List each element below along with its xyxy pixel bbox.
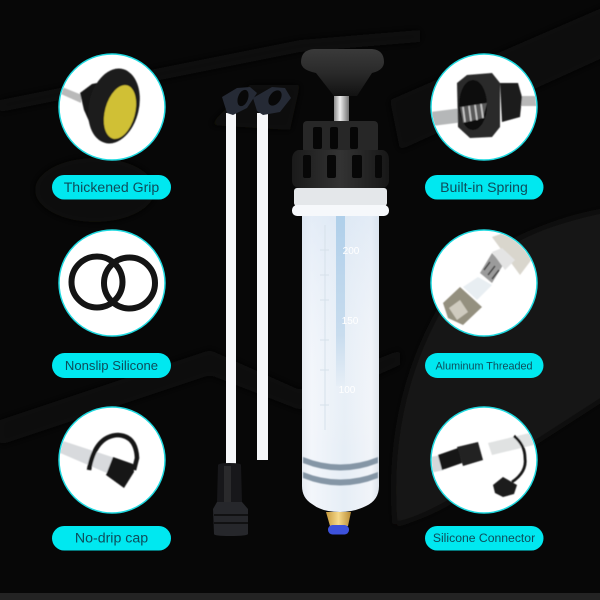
suction tubes bbox=[213, 87, 291, 536]
graduation marks: 150 bbox=[342, 316, 359, 327]
icon: thickened grip knob bbox=[59, 54, 165, 160]
panel: Aluminum Threaded bbox=[425, 230, 544, 378]
blue ring bbox=[328, 525, 349, 534]
label pill bbox=[52, 353, 171, 378]
label pill: Nonslip Silicone bbox=[65, 358, 158, 373]
label pill bbox=[52, 526, 171, 550]
panel: Nonslip Silicone bbox=[52, 230, 171, 378]
icon: silicone connector bbox=[430, 407, 542, 513]
lower cap bbox=[292, 150, 389, 188]
tube connector bbox=[213, 463, 248, 536]
hand pump syringe bbox=[292, 49, 389, 534]
syringe body bbox=[302, 215, 379, 512]
label pill: Thickened Grip bbox=[64, 179, 159, 195]
collar bbox=[292, 188, 389, 216]
label pill bbox=[52, 175, 171, 200]
panel: No-drip cap bbox=[52, 407, 171, 550]
label pill: Silicone Connector bbox=[433, 531, 535, 545]
icon: no-drip cap bbox=[58, 407, 165, 513]
brass nozzle bbox=[326, 512, 351, 526]
graduation marks bbox=[320, 225, 360, 430]
label pill bbox=[425, 175, 544, 200]
label pill bbox=[425, 526, 544, 550]
tube clips bbox=[222, 87, 291, 115]
panel: Thickened Grip bbox=[52, 54, 171, 200]
left tube bbox=[226, 113, 236, 464]
gauge bands bbox=[303, 457, 378, 486]
upper cap bbox=[303, 121, 378, 153]
panel: Built-in Spring bbox=[425, 54, 544, 200]
icon: built-in spring cap bbox=[430, 54, 538, 160]
label pill: Aluminum Threaded bbox=[435, 360, 533, 372]
panel: Silicone Connector bbox=[425, 407, 544, 550]
right tube bbox=[257, 113, 268, 460]
label pill: No-drip cap bbox=[75, 530, 148, 546]
icon: two o-rings bbox=[59, 230, 165, 336]
graduation marks: 200 bbox=[343, 246, 360, 257]
piston rod bbox=[334, 95, 349, 123]
center stripe bbox=[336, 216, 345, 386]
graduation marks: 100 bbox=[339, 385, 356, 396]
knob bbox=[301, 49, 384, 96]
label pill: Built-in Spring bbox=[440, 179, 528, 195]
label pill bbox=[425, 353, 544, 378]
icon: aluminum threaded fitting bbox=[431, 230, 537, 336]
